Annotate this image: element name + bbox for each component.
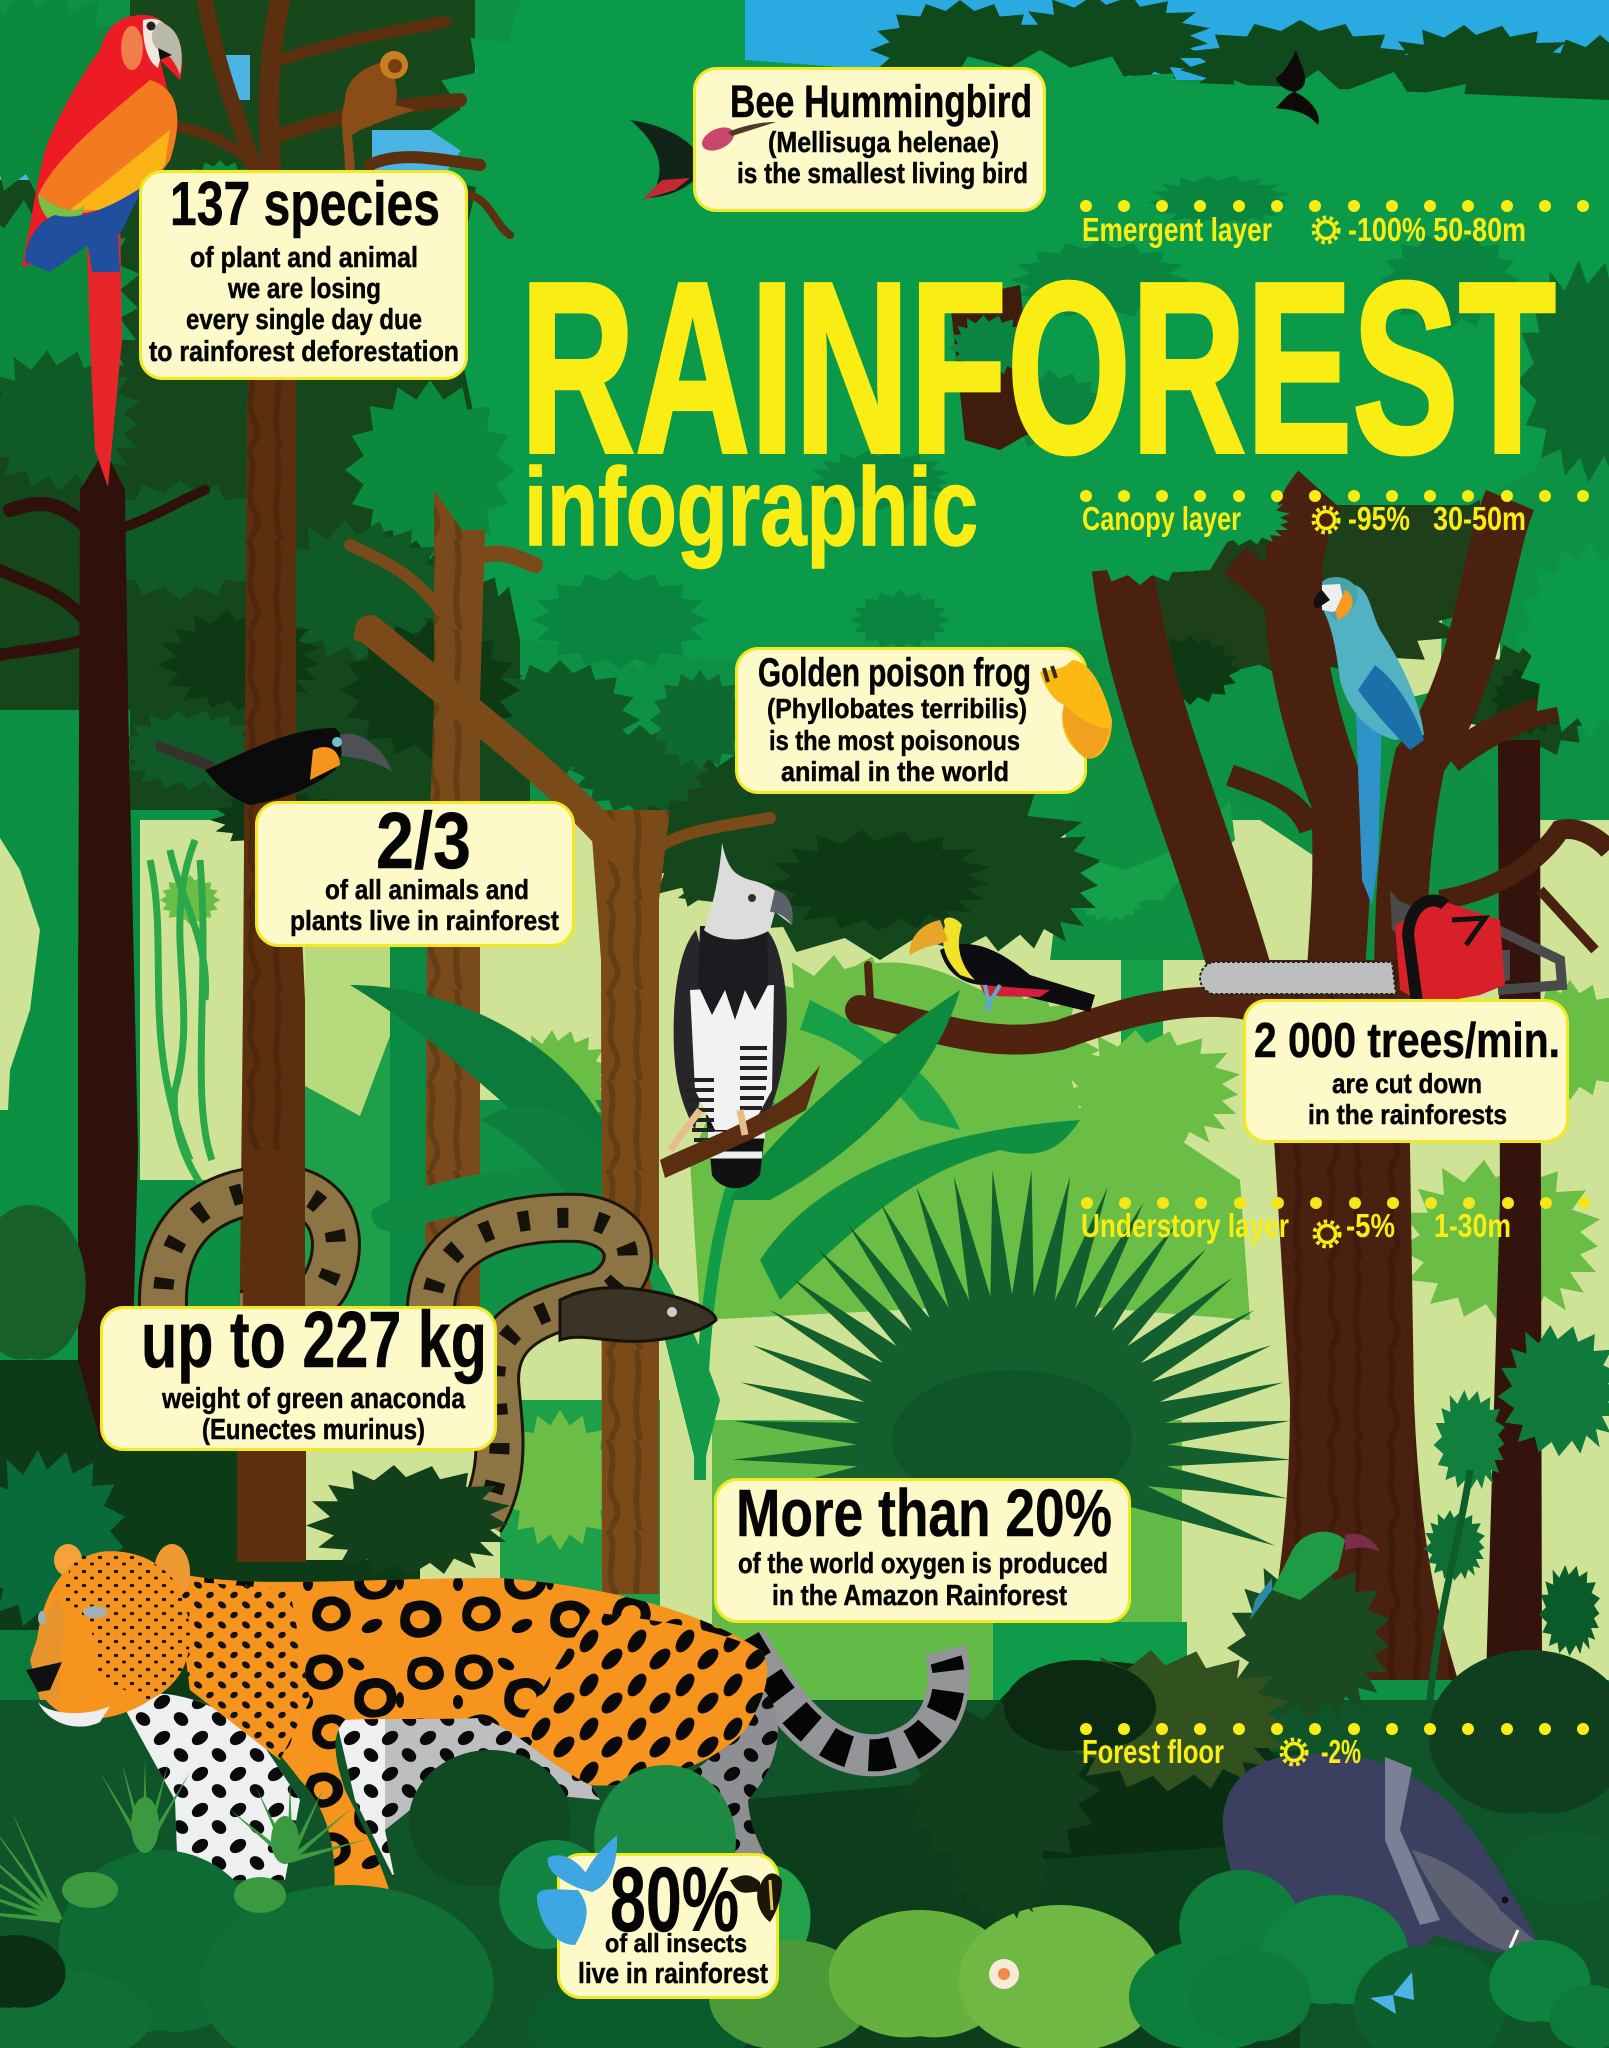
fan palm (732, 1170, 1292, 1558)
callout: insects: 80% (610, 1849, 739, 1951)
callout: insects: of all insects (605, 1928, 747, 1958)
ground layer dark plants (0, 1205, 1609, 2048)
jaguar haunch (520, 1612, 767, 1786)
eagle wings (674, 930, 787, 1130)
jaguar ears (54, 1544, 82, 1576)
tree 3 branches (350, 545, 535, 665)
callout: anaconda weight (102, 1295, 496, 1450)
keel billed toucan (910, 918, 1095, 1012)
brown branches behind canopy (948, 285, 1035, 450)
toucan branch (860, 965, 1270, 1040)
jaguar neck (175, 1580, 310, 1760)
eagle thighs (686, 1048, 767, 1140)
callout: anaconda weight: weight of green anaconda (161, 1383, 466, 1415)
butterfly over box left (537, 1835, 617, 1945)
tree 2 branches (170, 0, 510, 235)
fern left of tapir (948, 1800, 1050, 1921)
tail of jaguar (745, 1640, 949, 1755)
macaw body (22, 15, 182, 266)
tree trunk 2 (237, 170, 305, 1562)
callout: golden poison frog: is the most poisonous (769, 725, 1020, 756)
callout: anaconda weight: up to 227 kg (141, 1295, 487, 1384)
butterfly: black top (1276, 50, 1319, 125)
jaguar chest and white leg (120, 1694, 300, 1880)
trunk 2 in front of the snake (243, 1150, 305, 1320)
background: pale forest light (0, 560, 1609, 1802)
butterfly over box right (730, 1873, 782, 1922)
anaconda head (560, 1288, 716, 1341)
monkey (342, 51, 415, 170)
callout: 2000 trees per minute (1244, 1000, 1568, 1142)
layer: canopy: -95% (1348, 500, 1410, 537)
tree 4 branches (370, 630, 770, 850)
foliage: emerald canopy (430, 0, 1609, 670)
macaw wing yellow (38, 80, 177, 213)
eagle head (704, 843, 792, 939)
callout: bee hummingbird (694, 68, 1044, 210)
callout: 137 species (140, 170, 466, 378)
jaguar white inner leg (335, 1715, 395, 1880)
callout: oxygen: in the Amazon Rainforest (772, 1580, 1067, 1612)
layer: forest floor (1080, 1723, 1589, 1770)
foliage: blackish clusters (157, 610, 1570, 931)
callout: bee hummingbird: is the smallest living bird (737, 158, 1028, 190)
foreground leaves right (1179, 1830, 1609, 2048)
big tree trunk (1258, 960, 1458, 1680)
callout: insects (537, 1835, 782, 1998)
jaguar (26, 1544, 790, 1910)
eagle tail (706, 1115, 767, 1188)
tapir (1223, 1754, 1540, 1958)
eagle perch (660, 1065, 820, 1178)
callout: 2000 trees per minute: are cut down (1332, 1068, 1482, 1099)
chainsaw rear handle (1498, 930, 1562, 990)
callout: oxygen: More than 20% (736, 1476, 1112, 1551)
tree trunk 6 (1486, 740, 1542, 1680)
callout: 137 species: of plant and animal (190, 242, 418, 274)
chainsaw (1200, 890, 1562, 1010)
layer: understory: 1-30m (1434, 1207, 1511, 1244)
callout: 137 species: every single day due (186, 304, 422, 336)
jaguar head (34, 1551, 190, 1719)
eagle black collar (698, 926, 768, 1020)
background tree silhouette darker (800, 800, 1235, 1130)
dark plant over the snake (237, 1450, 510, 1576)
foliage: mid left dark clusters (0, 350, 710, 815)
callout: insects: live in rainforest (578, 1958, 768, 1990)
hummingbird head on box (698, 122, 776, 155)
subtitle: infographic (524, 446, 978, 569)
callout: 2/3: of all animals and (325, 874, 529, 905)
callout: golden poison frog: (Phyllobates terribilis) (767, 693, 1027, 724)
tree trunk 1 (78, 450, 138, 1450)
callout: bee hummingbird: (Mellisuga helenae) (768, 127, 999, 159)
vines (150, 840, 212, 1190)
anaconda (163, 1190, 628, 1520)
tree trunk 4 (590, 810, 670, 1594)
callout: oxygen: of the world oxygen is produced (738, 1548, 1108, 1580)
tree trunk 3 (425, 490, 485, 1320)
jaguar body (170, 1572, 767, 1910)
golden green bird (1250, 1532, 1380, 1620)
right side monstera and understory (1424, 1325, 1609, 1700)
hummingbird wing (630, 120, 704, 200)
callout: golden poison frog (736, 648, 1112, 792)
foliage: upper left clusters (0, 0, 515, 560)
layer: understory: -5% (1346, 1207, 1395, 1244)
upper left toucan (156, 728, 392, 805)
chainsaw bar (1200, 962, 1396, 994)
butterfly: blue small (1370, 1972, 1414, 2014)
callout: 2000 trees per minute: in the rainforests (1308, 1099, 1507, 1130)
layer: emergent (1080, 200, 1589, 248)
foliage: dark top edge of canopy (870, 0, 1609, 145)
callout: bee hummingbird: Bee Hummingbird (730, 76, 1032, 127)
blue macaw head (1322, 577, 1358, 620)
jaguar back leg (670, 1680, 790, 1895)
layer: understory: Understory layer (1081, 1207, 1289, 1244)
callout: 2/3 (256, 796, 574, 946)
macaw tail (87, 210, 122, 487)
callout: 137 species: 137 species (170, 170, 440, 239)
canopy right shade (1517, 260, 1609, 482)
blue macaw (1314, 577, 1424, 905)
layer: forest floor: -2% (1321, 1733, 1361, 1770)
flower (989, 1959, 1019, 1989)
callout: 2/3: 2/3 (376, 796, 471, 885)
callout: oxygen (716, 1476, 1130, 1622)
macaw head (143, 19, 181, 72)
callout: 137 species: we are losing (227, 273, 381, 305)
layer: canopy: 30-50m (1433, 500, 1526, 537)
chainsaw body (1395, 900, 1505, 1005)
blue macaw body (1318, 580, 1424, 740)
callout: golden poison frog: Golden poison frog (758, 651, 1031, 695)
loop two (431, 1218, 628, 1520)
foliage: canopy shadow patches (530, 175, 1520, 670)
jaguar belly (370, 1700, 600, 1830)
eagle white belly (690, 985, 774, 1130)
macaw red parrot (22, 15, 182, 487)
callout: golden poison frog: animal in the world (781, 756, 1009, 787)
macaw lower blue wing (25, 185, 145, 272)
small fan palms at jaguar (0, 1760, 368, 1923)
tree 1 branches (0, 490, 205, 655)
foreground leaves (0, 1750, 1291, 2048)
banana leaves (350, 985, 1080, 1480)
background trees silhouettes (160, 875, 1609, 1550)
callout: 2/3: plants live in rainforest (290, 905, 559, 936)
foliage over branch tips (1065, 495, 1609, 740)
harpy eagle (660, 843, 820, 1188)
layer: emergent: Emergent layer (1082, 211, 1272, 248)
layer: emergent: -100% 50-80m (1348, 211, 1526, 248)
callout: 137 species: to rainforest deforestation (149, 336, 459, 368)
layer: canopy (1080, 490, 1589, 537)
chainsaw front handle (1408, 900, 1445, 1010)
frog on box (1040, 660, 1112, 759)
callout: anaconda weight: (Eunectes murinus) (202, 1414, 425, 1446)
layer: understory (1081, 1197, 1590, 1246)
foliage near toucan bough (650, 670, 750, 770)
foliage: upper dark layer (0, 180, 1600, 960)
layer: forest floor: Forest floor (1082, 1733, 1224, 1770)
big tree branches (1120, 490, 1609, 1000)
blue macaw tail (1356, 715, 1382, 905)
loop one (163, 1190, 336, 1330)
layer: canopy: Canopy layer (1082, 500, 1241, 537)
